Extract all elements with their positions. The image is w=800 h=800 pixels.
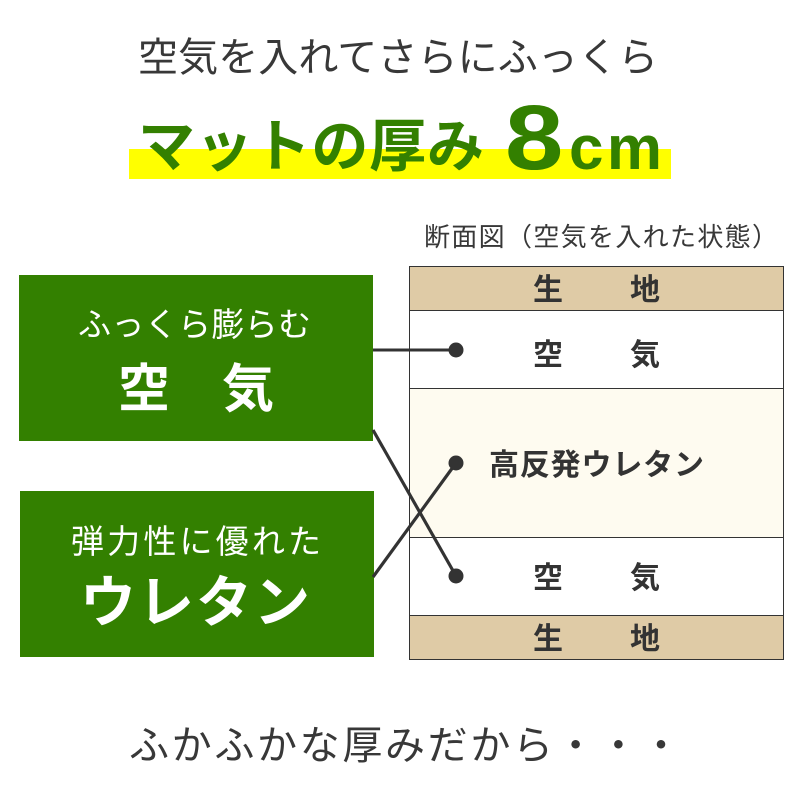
layer: lower air: 気 <box>630 562 660 595</box>
layer: bottom fabric: 地 <box>630 623 660 656</box>
caption: cross-section: 断面図（空気を入れた状態） <box>424 222 778 252</box>
layer: top fabric <box>410 266 784 310</box>
heading: mat thickness 8cm: 8 <box>505 86 563 189</box>
panel: urethane label: ウレタン <box>80 571 310 634</box>
layer: upper air: 気 <box>630 339 660 372</box>
layer: urethane <box>410 388 784 538</box>
panel: air label: 気 <box>222 361 274 419</box>
layer: urethane: 高反発ウレタン <box>489 449 704 482</box>
layer: lower air: 空 <box>533 562 563 595</box>
panel: urethane label: 弾力性に優れた <box>71 523 321 560</box>
heading: subtitle: 空気を入れてさらにふっくら <box>138 36 658 80</box>
layer: top fabric: 地 <box>630 274 660 307</box>
layer: bottom fabric <box>410 616 784 660</box>
panel: air label <box>19 275 373 441</box>
heading: mat thickness 8cm: マットの厚み <box>138 115 484 179</box>
panel: air label: 空 <box>118 361 170 419</box>
text: closing line: ふかふかな厚みだから・・・ <box>129 724 681 768</box>
panel: urethane label <box>20 491 374 657</box>
arrow: air to lower layer <box>373 430 464 584</box>
layer: top fabric: 生 <box>533 274 563 307</box>
layer: upper air <box>410 310 784 388</box>
panel: air label: ふっくら膨らむ <box>78 306 311 343</box>
layer: upper air: 空 <box>533 339 563 372</box>
arrow: urethane to urethane layer <box>373 456 464 577</box>
heading: mat thickness 8cm <box>129 86 671 189</box>
heading: mat thickness 8cm: cm <box>569 114 662 183</box>
arrow: air to upper layer <box>373 342 464 358</box>
layer: bottom fabric: 生 <box>533 623 563 656</box>
layer: lower air <box>410 538 784 616</box>
panel: cross-section diagram <box>410 266 784 660</box>
